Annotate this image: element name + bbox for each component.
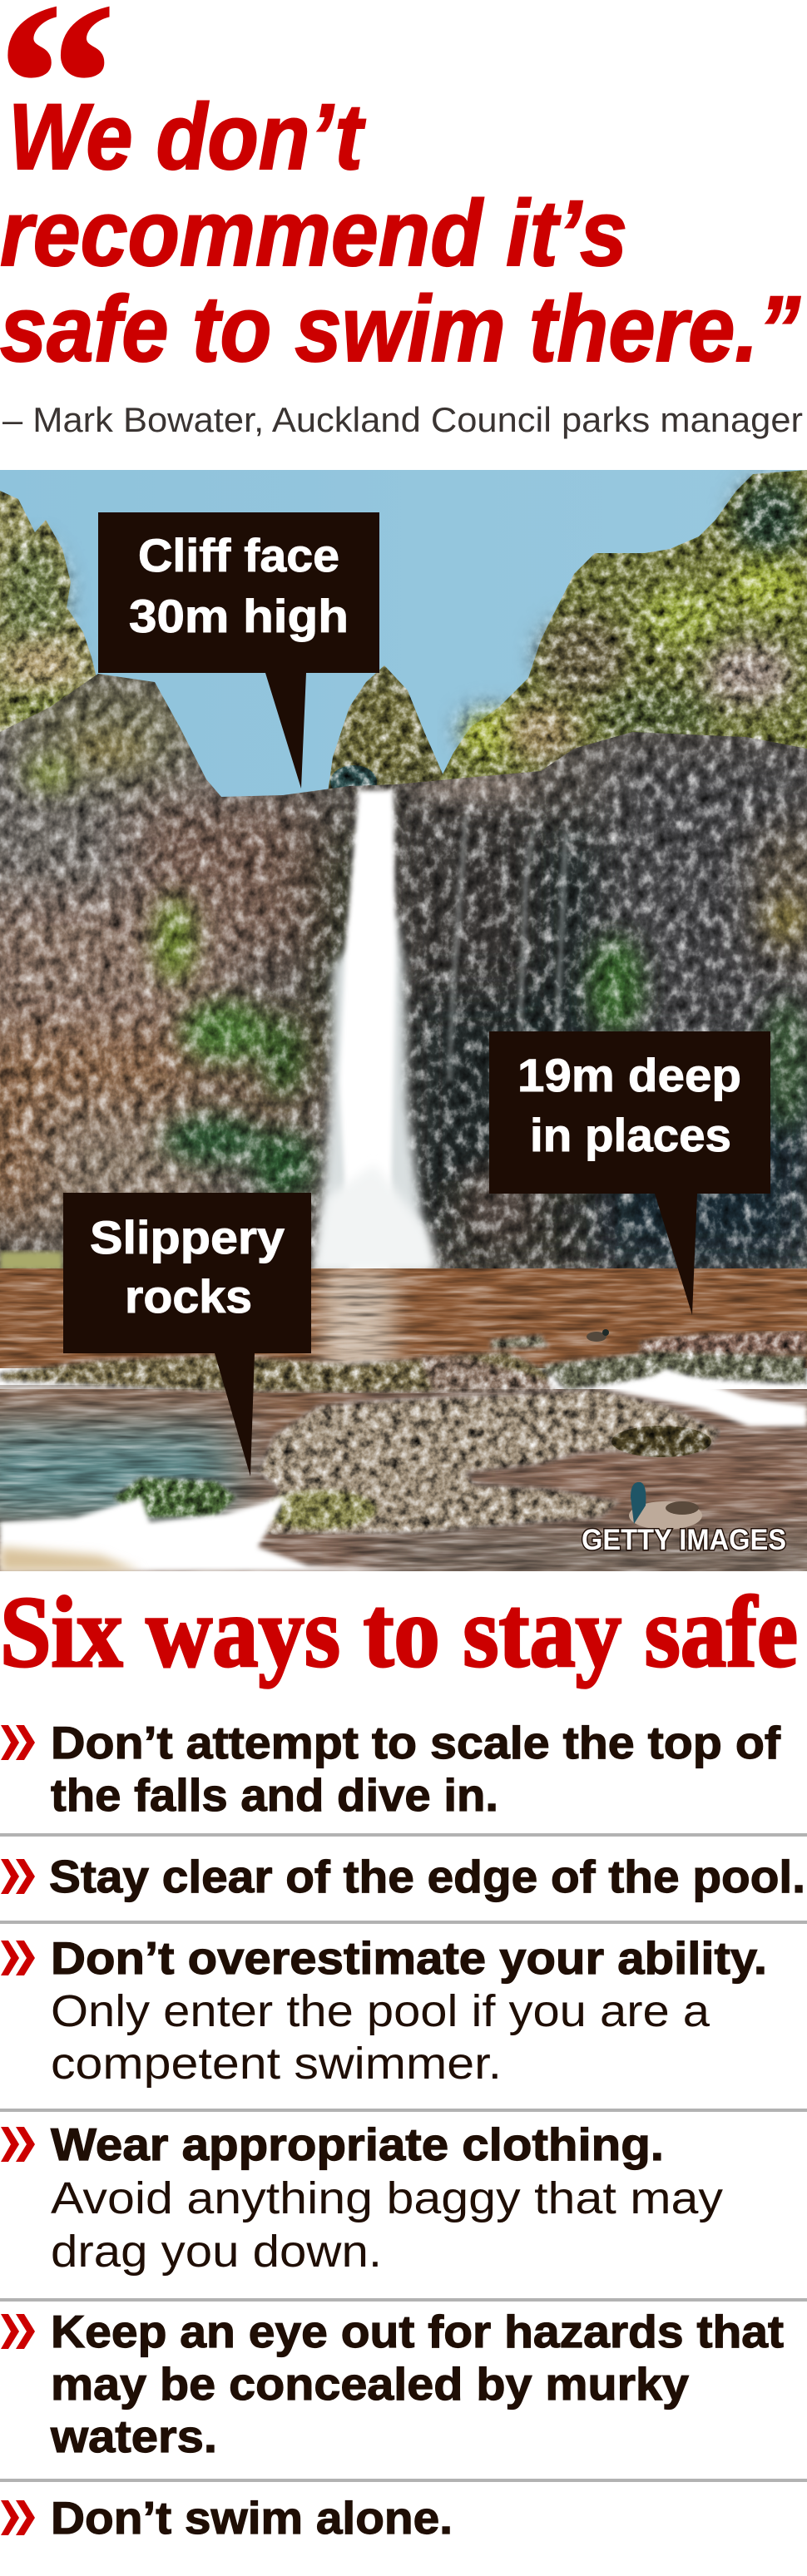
tip 4: Wear appropriate clothing. — [51, 2119, 664, 2170]
photo: waterfall and pool — [0, 470, 807, 1580]
side trickles on the cliff — [449, 815, 566, 1106]
pull quote — [0, 85, 800, 381]
waterfall — [313, 790, 439, 1273]
icon: chevrons — [1, 2127, 35, 2162]
callout: depth: 19m deep — [517, 1049, 741, 1101]
callout: cliff face: 30m high — [129, 590, 349, 642]
tip 5: waters. — [50, 2410, 217, 2462]
dark mossy boulder — [611, 1426, 711, 1457]
central mossy rocks — [112, 1389, 720, 1535]
pull quote: recommend it’s — [0, 181, 627, 285]
tip 3: Don’t overestimate your ability. — [51, 1932, 767, 1984]
tip 4: drag you down. — [51, 2227, 382, 2277]
duck in foreground — [629, 1482, 702, 1530]
tip 5 — [1, 2306, 784, 2462]
tip 5: may be concealed by murky — [51, 2358, 689, 2410]
quote attribution: – Mark Bowater, Auckland Council parks manager — [2, 400, 803, 439]
tip 1 — [1, 1717, 781, 1821]
left hillside vegetation — [0, 491, 97, 732]
icon: chevrons — [1, 1941, 35, 1975]
grassy bank left — [0, 1252, 62, 1270]
tip 3 — [1, 1932, 767, 2089]
small duck on pool — [587, 1329, 609, 1342]
callout: slippery rocks — [63, 1193, 311, 1476]
icon: chevrons — [1, 1859, 35, 1894]
icon: chevrons — [1, 1725, 35, 1760]
icon: chevrons — [1, 2500, 35, 2535]
right hillside vegetation — [437, 470, 807, 799]
callout: slippery rocks: Slippery — [90, 1211, 285, 1263]
tip 3: Only enter the pool if you are a — [51, 1986, 710, 2036]
brown pool — [0, 1268, 807, 1368]
cliff rock face — [0, 665, 807, 1281]
tip 4: Avoid anything baggy that may — [51, 2173, 723, 2223]
tip 2: Stay clear of the edge of the pool. — [49, 1851, 805, 1902]
tip 6: Don’t swim alone. — [51, 2492, 453, 2544]
tip 3: competent swimmer. — [51, 2039, 502, 2089]
pull quote: We don’t — [8, 85, 366, 189]
callout: slippery rocks: rocks — [125, 1270, 252, 1323]
tip 1: the falls and dive in. — [51, 1769, 498, 1821]
central trees behind the falls — [328, 665, 443, 789]
callout: cliff face: Cliff face — [138, 529, 339, 581]
tip 5: Keep an eye out for hazards that — [51, 2306, 784, 2357]
callout: depth — [489, 1031, 770, 1315]
white rapids — [0, 1368, 807, 1571]
photo credit: GETTY IMAGES — [582, 1524, 786, 1556]
callout: depth: in places — [530, 1109, 731, 1161]
tip 4 — [1, 2119, 723, 2277]
lower stream — [0, 1385, 807, 1580]
tip 1: Don’t attempt to scale the top of — [51, 1717, 781, 1768]
callout: cliff face — [98, 512, 379, 789]
rock shelf band — [0, 1331, 807, 1393]
icon: chevrons — [1, 2314, 35, 2349]
